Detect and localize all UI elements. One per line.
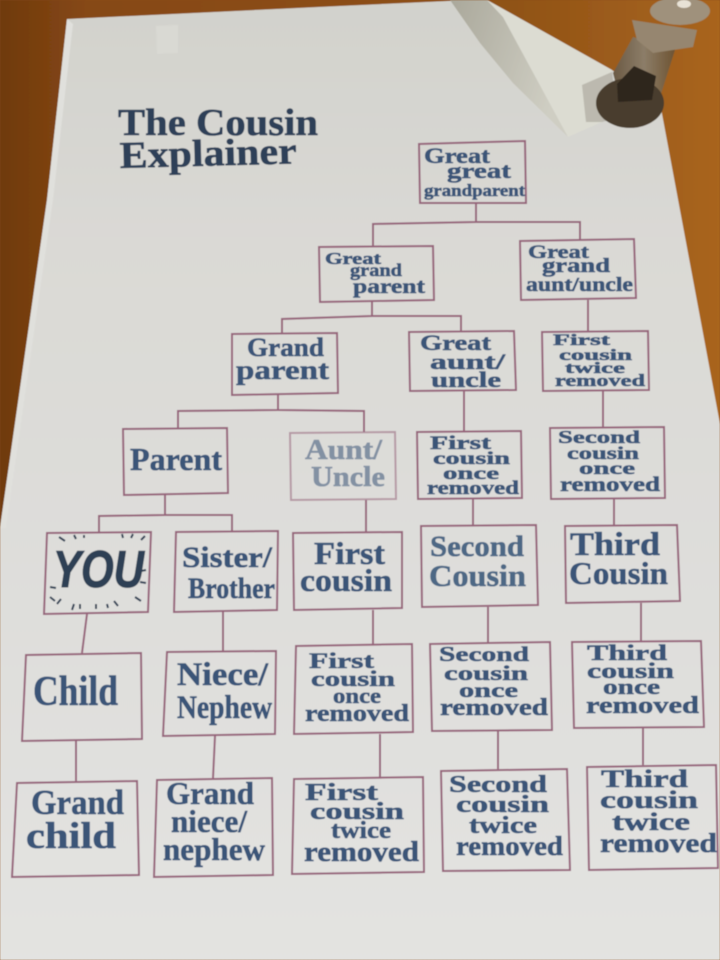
box: sister/brother: Brother <box>188 572 275 605</box>
box: third cousin once removed, lower: removed <box>586 693 700 719</box>
box: grandchild: child <box>26 816 116 857</box>
box: third cousin once removed, lower: once <box>603 674 660 699</box>
box: first cousin once removed, lower: once <box>333 683 381 708</box>
box: first cousin twice removed: removed <box>555 371 646 390</box>
box: third cousin twice removed, lower: removed <box>600 828 717 858</box>
box: first cousin twice removed: cousin <box>559 347 632 364</box>
box: third cousin once removed, lower: cousin <box>587 658 674 683</box>
shadow cast by mill <box>582 72 618 122</box>
box: second cousin once removed, lower: once <box>459 678 518 702</box>
box: sister/brother: Sister/ <box>182 541 273 574</box>
box: great grandparent: grand <box>350 260 402 280</box>
box: aunt/uncle <box>290 432 396 500</box>
box: first cousin once removed, upper: removed <box>427 478 520 499</box>
box: great aunt/uncle: aunt/ <box>430 349 506 374</box>
box: third cousin <box>565 525 680 603</box>
box: third cousin: Third <box>570 527 660 563</box>
box: niece/nephew <box>163 651 276 736</box>
fold shadow <box>450 0 568 137</box>
box: great grandparent <box>319 246 434 302</box>
box: great aunt/uncle: Great <box>420 330 492 355</box>
left hem highlight <box>0 19 73 528</box>
folded cloth corner <box>487 0 612 137</box>
box: first cousin twice removed, lower: First <box>305 780 378 806</box>
box: aunt/uncle: Uncle <box>311 461 385 493</box>
box: first cousin twice removed: First <box>553 332 611 349</box>
faded tag at top of cloth <box>156 25 178 54</box>
box: third cousin twice removed, lower <box>587 765 718 870</box>
box: aunt/uncle: Aunt/ <box>305 434 383 466</box>
box: great grandparent: Great <box>325 249 381 268</box>
box: first cousin: cousin <box>300 562 392 598</box>
box: grandchild <box>12 781 139 877</box>
box: second cousin once removed, lower: cousin <box>444 661 528 685</box>
title: The Cousin <box>118 102 318 144</box>
box: second cousin once removed, upper <box>550 427 665 499</box>
box: grandparent <box>232 333 338 395</box>
box: sister/brother <box>174 531 278 612</box>
box: third cousin once removed, lower: Third <box>587 640 667 665</box>
box: grandchild: Grand <box>31 783 124 822</box>
box: grandparent: Grand <box>247 333 325 362</box>
title <box>118 102 318 177</box>
title: Explainer <box>119 130 297 177</box>
box: great great grandparent: Great <box>424 143 491 168</box>
box: parent <box>123 428 228 495</box>
box: third cousin twice removed, lower: Third <box>601 766 688 793</box>
box: first cousin twice removed, lower: removed <box>304 837 419 868</box>
box: first cousin once removed, lower: First <box>309 648 375 673</box>
box: second cousin twice removed, lower: twice <box>469 813 537 839</box>
box: third cousin twice removed, lower: twice <box>612 809 690 836</box>
box: first cousin twice removed: twice <box>565 360 625 377</box>
box: second cousin once removed, upper: once <box>579 458 635 478</box>
box: great aunt/uncle <box>409 330 516 392</box>
box: second cousin twice removed, lower <box>441 769 570 871</box>
box: first cousin twice removed, lower: twice <box>331 818 391 844</box>
box: second cousin twice removed, lower: Second <box>449 772 548 798</box>
box: second cousin once removed, upper: cousin <box>567 443 639 463</box>
box: first cousin twice removed <box>542 331 649 391</box>
pepper mill <box>596 0 710 128</box>
box: child <box>22 653 142 741</box>
connector lines <box>76 203 643 781</box>
box: third cousin once removed, lower <box>572 640 704 728</box>
box: second cousin: Second <box>430 530 524 563</box>
box: grand niece/nephew: niece/ <box>171 803 248 839</box>
box: third cousin twice removed, lower: cousin <box>600 787 698 814</box>
box: first cousin once removed, upper: First <box>430 433 492 454</box>
box: great great grandparent: grandparent <box>424 181 525 200</box>
box: first cousin twice removed, lower <box>292 777 424 874</box>
box: child: Child <box>33 669 118 715</box>
box: grandparent: parent <box>236 355 329 385</box>
box: great grand aunt/uncle: Great <box>528 242 590 263</box>
box: first cousin twice removed, lower: cousin <box>310 799 404 825</box>
box: parent: Parent <box>130 441 222 477</box>
sunburst ticks <box>50 534 146 610</box>
box: second cousin: Cousin <box>429 558 526 593</box>
box: you: YOU <box>53 541 145 599</box>
box: first cousin once removed, lower <box>294 644 413 734</box>
box: second cousin twice removed, lower: cousin <box>456 792 549 818</box>
box: great grandparent: parent <box>353 274 425 298</box>
box: first cousin once removed, lower: removed <box>305 701 410 727</box>
box: first cousin <box>293 532 402 610</box>
box: second cousin once removed, lower: removed <box>440 695 549 721</box>
box: great great grandparent <box>419 141 526 203</box>
box: grand niece/nephew <box>154 775 273 877</box>
box: first cousin once removed, upper <box>417 431 522 499</box>
box: great great grandparent: great <box>447 158 512 183</box>
box: second cousin <box>421 525 538 607</box>
box: niece/nephew: Nephew <box>177 690 272 726</box>
box: first cousin once removed, lower: cousin <box>311 666 395 691</box>
box: first cousin once removed, upper: once <box>443 463 499 483</box>
box: second cousin twice removed, lower: removed <box>456 831 563 861</box>
box: second cousin once removed, lower <box>430 642 552 731</box>
box: grand niece/nephew: nephew <box>163 831 265 867</box>
box: second cousin once removed, upper: removed <box>560 472 660 496</box>
box: second cousin once removed, upper: Second <box>558 427 640 447</box>
box: niece/nephew: Niece/ <box>177 657 269 693</box>
box: grand niece/nephew: Grand <box>166 775 254 811</box>
box: second cousin once removed, lower: Second <box>439 642 529 666</box>
box: great grand aunt/uncle <box>520 239 636 300</box>
box: great grand aunt/uncle: aunt/uncle <box>526 274 633 296</box>
box: first cousin: First <box>314 535 385 571</box>
box: great grand aunt/uncle: grand <box>542 255 610 277</box>
box: third cousin: Cousin <box>569 555 668 591</box>
box: you <box>44 532 151 614</box>
box: great aunt/uncle: uncle <box>431 367 501 392</box>
box: first cousin once removed, upper: cousin <box>433 448 510 468</box>
